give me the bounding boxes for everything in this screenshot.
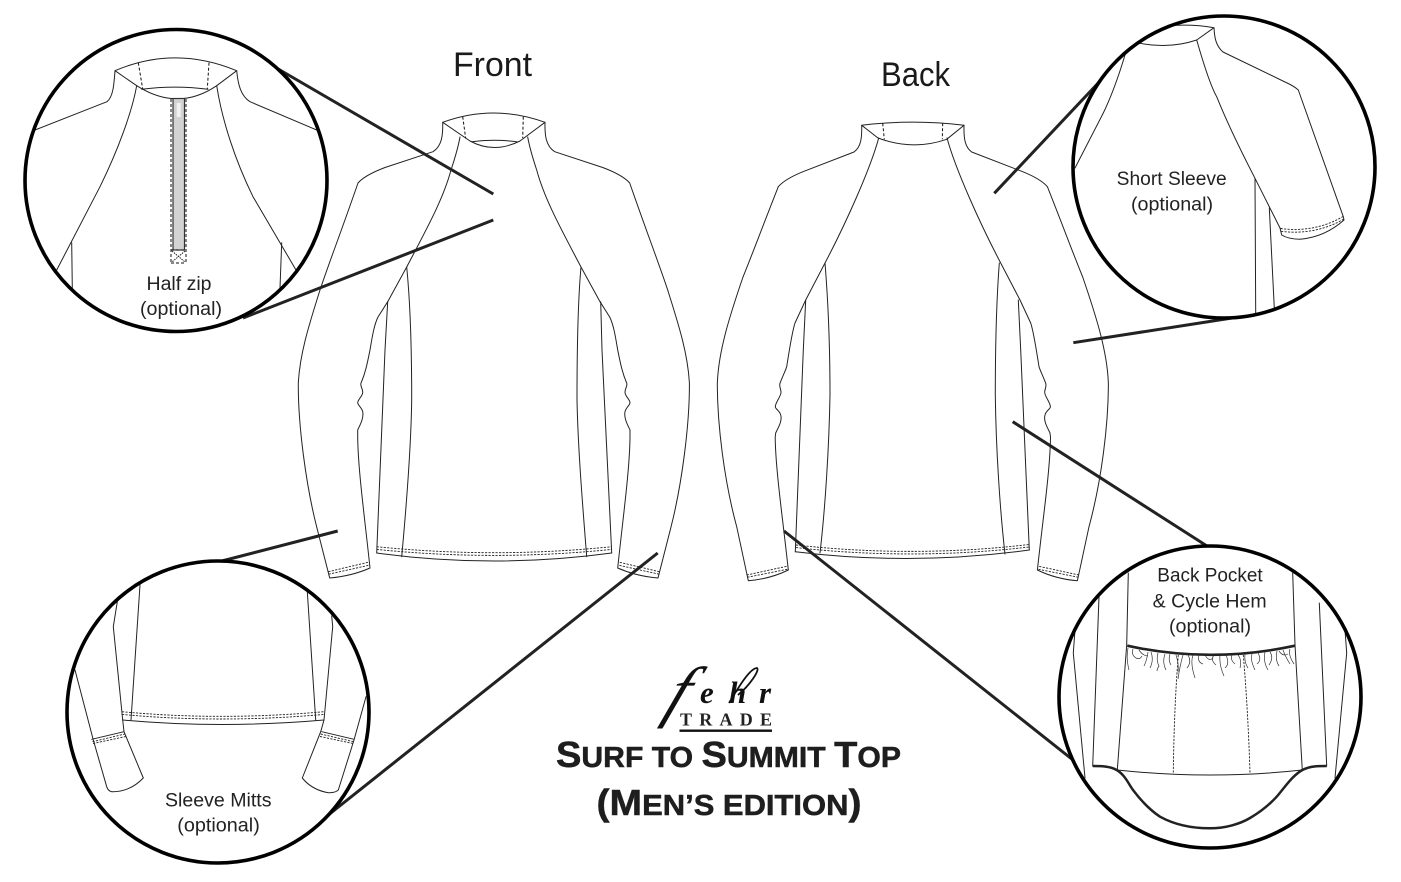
enlarged collar and shoulders (35, 58, 317, 288)
enlarged short sleeve (1075, 25, 1344, 313)
label: back pocket and cycle hem (1153, 566, 1267, 637)
leader lines: half zip (243, 66, 493, 318)
label: back pocket and cycle hem: Back Pocket (1157, 566, 1263, 587)
logo: fehr trade: TRADE (680, 710, 772, 730)
label: short sleeve: Short Sleeve (1117, 169, 1227, 190)
label: half zip: Half zip (146, 274, 212, 295)
back view garment (717, 122, 1108, 581)
front collar (443, 113, 545, 148)
label: half zip (140, 274, 222, 320)
title: (MEN’S EDITION ) (596, 782, 862, 823)
heading: Front: Front (453, 46, 533, 84)
heading: Back: Back (881, 56, 951, 94)
front right sleeve (528, 122, 689, 578)
callout: back pocket and cycle hem (1059, 546, 1361, 848)
half zip (171, 98, 186, 263)
enlarged hem and mitts (75, 585, 366, 793)
label: short sleeve: (optional) (1131, 194, 1213, 216)
waist seam (1127, 646, 1295, 655)
pocket gathers (1127, 648, 1294, 679)
cycle hem (1093, 766, 1327, 828)
label: sleeve mitts (165, 791, 272, 837)
title: SURF TO SUMMIT TOP (556, 734, 901, 775)
logo: fehr trade: r (759, 675, 772, 710)
callout: half zip (25, 30, 327, 332)
enlarged back panels (1073, 573, 1347, 778)
callout: short sleeve (1073, 16, 1375, 318)
back left sleeve (717, 125, 879, 581)
front left sleeve (298, 122, 460, 578)
logo: fehr trade: h (729, 675, 746, 710)
back body panels and hem (795, 263, 1029, 558)
label: short sleeve (1117, 169, 1227, 216)
back collar (862, 122, 964, 145)
logo: fehr trade (656, 654, 772, 732)
label: sleeve mitts: Sleeve Mitts (165, 791, 272, 812)
callout: sleeve mitts (67, 561, 369, 863)
label: back pocket and cycle hem: (optional) (1169, 616, 1251, 637)
title (556, 734, 901, 823)
leader lines: back pocket (784, 422, 1207, 760)
back right sleeve (947, 125, 1108, 581)
logo: fehr trade: f (656, 654, 713, 729)
label: half zip: (optional) (140, 299, 222, 320)
front view garment (298, 113, 689, 578)
leader lines: sleeve mitts (218, 531, 658, 815)
logo: fehr trade: e (700, 675, 714, 710)
label: back pocket and cycle hem: & Cycle Hem (1153, 591, 1267, 612)
front body panels and hem (377, 267, 612, 561)
label: sleeve mitts: (optional) (177, 816, 260, 837)
leader lines: short sleeve (994, 62, 1232, 343)
